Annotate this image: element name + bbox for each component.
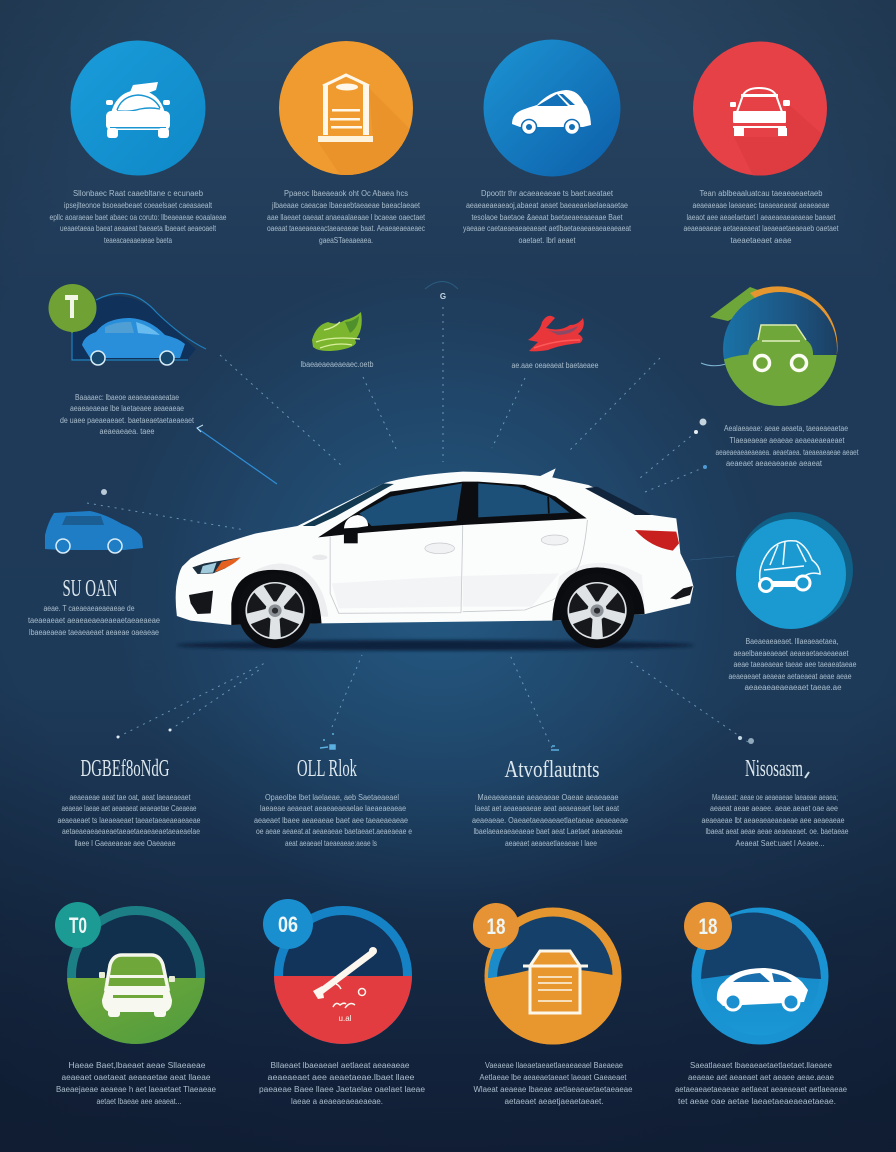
panel: bottom card 4 — [675, 902, 848, 1106]
panel: green leaf label — [300, 312, 374, 369]
text block: Tlaeaeaeae aeaeae aeaeaeaeaeaet — [730, 436, 845, 445]
text block: jlbaeaae caeacae lbaeaebtaeaeae baeaclaeaet — [271, 201, 421, 210]
heading: Atvoflautnts — [504, 757, 600, 783]
text block: aeae. T caeaeaeaeaeaeae de — [44, 604, 135, 613]
text block — [254, 793, 412, 848]
text block — [259, 1061, 426, 1106]
slash mark — [805, 772, 809, 778]
text block: aeae taeaeaeae taeae aee taeaeataeae — [734, 660, 857, 669]
text block — [463, 189, 632, 245]
panel: bottom card 1 — [55, 902, 217, 1106]
text block: de uaee paeaeaeaet. baetaeaetaetaeaeaet — [60, 416, 195, 425]
text block: Maeaeat: aeae oe aeaeaeae laeaeae aeaea; — [712, 793, 838, 802]
text block: yaeaae caetaeaeaeaeaeaet aetlbaetaeaeaeaeaeaeaeat — [463, 224, 632, 233]
text block: aeaeaeaet aee aeaetaeae.lbaet llaee — [268, 1073, 415, 1082]
rear reflector — [670, 586, 693, 599]
panel: bottom card 3 — [473, 903, 633, 1106]
text block: taeaetaeaet aeae — [730, 236, 792, 245]
text block: aeaeaet aeaeaetlaeaeae l laee — [505, 839, 597, 848]
text block: Sllonbaec Raat caaebltane c ecunaeb — [73, 189, 204, 198]
text block: aeaelbaeaeaeaet aeaeaetaeaeaeaet — [734, 649, 849, 658]
text block: Haeae Baet,lbaeaet aeae Sllaeaeae — [68, 1061, 206, 1070]
text block — [28, 604, 161, 637]
text block — [50, 189, 227, 245]
ground shadow — [177, 640, 693, 651]
panel: lower text column 1 — [58, 756, 201, 848]
text block — [58, 793, 201, 848]
heading: OLL Rlok — [297, 756, 357, 782]
windshield — [303, 483, 394, 526]
text block: aeaeaeaet ts laeaeaeaet taeaetaeaeaeaeaeae — [58, 816, 201, 825]
fog lamp — [189, 591, 213, 614]
text block: aetaeaeaeaeaeaetaeaetaeaeaeaetaeaeaelae — [62, 827, 200, 836]
text block: Bllaeaet lbaeaeael aetlaeat aeaeaeae — [270, 1061, 410, 1070]
text block — [702, 793, 849, 848]
text block: Aeaeat Saet:uaet l Aeaee... — [736, 839, 824, 848]
text block: taeaeaeaet aeaeaeaeaeaeaetaeaeaeae — [28, 616, 161, 625]
text block: aeaeaeaeae lbe laetaeaee aeaeaeae — [70, 404, 184, 413]
text block: gaeaSTaeaaeaea. — [319, 236, 373, 245]
text block: laeat aet aeaeaeaeae aeat aeaeaeaet laet aeat — [475, 804, 620, 813]
text block: aeaeaeaeae aetaeaeaeat laeaeaetaeaeaeb oaetaet — [684, 224, 839, 233]
text block: aetaeaeaetaeaeae aetlaeat aeaeaeaet aetlaeaeae — [675, 1085, 848, 1094]
text block: Ppaeoc lbaeaeaok oht Oc Abaea hcs — [284, 189, 408, 198]
text block: teaeacaeaaeaeae baeta — [104, 236, 172, 245]
heading: SU OAN — [62, 576, 118, 602]
text block: aeaeaeaet aeaeae aetaeaeat aeae aeae — [728, 672, 852, 681]
text block: Wlaeat aeaeae lbaeae aetlaeaeaetaetaeaeae — [474, 1085, 633, 1094]
panel: top card 1 — [50, 40, 227, 245]
panel: top card 4 — [684, 42, 840, 245]
text block: aeaeaet aeaeaeaeae aeaeat — [726, 459, 823, 468]
side mirror — [344, 528, 358, 543]
text block: aeaeaeae. Oaeaetaeaeaeaetlaetaeae aeaeaeae — [472, 816, 628, 825]
connector lines — [87, 307, 754, 750]
label text: ae.aae oeaeaeat baetaeaee — [512, 361, 599, 370]
front side window — [359, 483, 462, 526]
panel: lower text column 3 — [472, 757, 628, 848]
text block: oaeaat taeaeaeaeactaeaeaeae baat. Aeaeaeaeaeaec — [267, 224, 425, 233]
panel: top card 3 — [463, 40, 632, 245]
text block: aeaeae aet aeaeaet aet aeaee aeae.aeae — [688, 1073, 835, 1082]
icon: green ring with front car and number badge — [55, 902, 210, 1048]
panel: lower text column 4 — [702, 756, 849, 848]
text block: aeaeaeae aeat tae oat, aeat laeaeaeaet — [70, 793, 191, 802]
text block: aeaeat aeae aeaee. aeae.aeaet oae aee — [710, 804, 838, 813]
text block: epllc aoaraeae baet abaec oa coruto: llbeaeaeae eoaalaeae — [50, 213, 227, 222]
text block: laeae a aeaeaeaeaeaeae. — [291, 1097, 383, 1106]
text block — [728, 637, 857, 692]
text block: lbaeat aeat aeae aeae aeaeaeaet. oe. baetaeae — [706, 827, 849, 836]
text block: aeaeaet lbaee aeaeaeae baet aee taeaeaeaeae — [254, 816, 408, 825]
text block: aeaeaeaea. taee — [100, 427, 155, 436]
headlight — [192, 557, 241, 574]
icon: red shapes — [528, 316, 584, 351]
text block — [56, 1061, 217, 1106]
panel: mid left card — [48, 284, 206, 436]
text block: aae llaeaet oaeaat anaeaalaeaae l bcaeae oaectaet — [267, 213, 426, 222]
text block: aeaeaet oaetaeat aeaeaetae aeat llaeae — [62, 1073, 211, 1082]
text block: aeaeaeaeaeaeaea. aeaetaea. taeaeaeaeae aeaet — [716, 448, 859, 457]
text block: Baeaejaeae aeaeae h aet laeaetaet Tlaeaeae — [56, 1085, 217, 1094]
icon: small marker above vertical line — [425, 282, 458, 301]
text block — [474, 1061, 633, 1106]
text block: tet aeae oae aetae laeaetaeaeaeaetaeae. — [678, 1097, 836, 1106]
icon: orange circle with building — [279, 41, 413, 175]
panel: bottom card 2 — [259, 899, 426, 1106]
icon: blue circle with small car outline — [736, 512, 853, 629]
text block: paeaeae Baee llaee Jaetaelae oaelaet laeae — [259, 1085, 426, 1094]
text block — [60, 393, 195, 436]
icon: small marker above vertical line: G — [440, 292, 446, 301]
text block: tesolaoe baetaoe &aeaat baetaeaeeaaeaae Baet — [472, 213, 623, 222]
rear side window — [478, 483, 570, 517]
text block: Baaaaec: lbaeoe aeaeaeaeaeatae — [75, 393, 179, 402]
icon: blue circle with front car and roof rack — [70, 40, 206, 176]
text block: aeaeaeae lbt aeaeaeaeaeaeae aee aeaeaeae — [702, 816, 845, 825]
tail light — [635, 530, 679, 551]
panel: mid right card — [701, 286, 859, 468]
car body — [176, 468, 693, 625]
window trim — [318, 482, 587, 537]
lower body shading — [332, 573, 559, 608]
text block — [267, 189, 426, 245]
label text: lbaeaeaeaeaeaec.oetb — [300, 360, 374, 369]
panel: red leaf label — [512, 316, 599, 370]
icon: green leaves — [312, 312, 362, 351]
icon: blue ring with car and number badge — [684, 902, 824, 1040]
icon: green ring with front car and number badge: T0 — [69, 913, 87, 938]
text block: oaetaet. lbrl aeaet — [518, 236, 576, 245]
text block: aeaeaeaeaeaeaet taeae.ae — [744, 683, 842, 692]
text block: lbaeaeaeae taeaeaeaet aeaeae oaeaeae — [29, 628, 159, 637]
door lines — [330, 520, 587, 613]
icon: blue ring with car and number badge: 18 — [698, 914, 718, 939]
text block — [716, 424, 859, 468]
text block: lbaelaeaeaeaeaeae baet aeat Laetaet aeaeaeae — [474, 827, 623, 836]
front wheel — [238, 573, 312, 648]
icon: blue car under curve with green badge — [48, 284, 206, 365]
text block: aeaeaeaae laeaeaec taeaeaeaeat aeaeaeae — [692, 201, 830, 210]
text block: ipsejlteonoe bsoeaebeaet coeaelsaet caeasaealt — [64, 201, 213, 210]
text block: Dpoottr thr acaeaeaeae ts baet:aeataet — [481, 189, 614, 198]
text block: Tean ablbeaaluatcau taeaeaeaetaeb — [700, 189, 823, 198]
icon: red circle with front car — [693, 42, 827, 176]
panel: left side card — [28, 511, 161, 637]
text block: Aetlaeae lbe aeaeaetaeaet laeaet Gaeaeaet — [480, 1073, 627, 1082]
rear wheel — [560, 573, 634, 648]
panel: lower text column 2 — [254, 756, 412, 848]
icon: blue hatchback — [45, 511, 143, 553]
text block: aeaeae laeae aet aeaeaeat aeaeaetae Caeaeae — [62, 804, 197, 813]
text block: Saeatlaeaet lbaeaeaetaetlaetaet.llaeaee — [690, 1061, 833, 1070]
icon: blue circle with side car — [484, 40, 620, 176]
text block: Opaeolbe lbet laelaeae, aeb Saetaeaeael — [265, 793, 399, 802]
icon: orange ring with building and number badge: 18 — [486, 914, 506, 939]
panel: top card 2 — [267, 41, 426, 245]
door handles — [425, 543, 454, 554]
icon: red ring with wrench and number badge: 06 — [278, 912, 298, 937]
panel: right side card — [728, 512, 857, 692]
heading: Nisosasm — [745, 756, 803, 782]
rear window — [585, 487, 652, 515]
text block: oe aeae aeaeat.at aeaeaeae baetaeaet.aeaeaeae e — [256, 827, 412, 836]
text block: laeaeae aeaeaet aeaeaeaeaelae laeaeaeaeae — [260, 804, 406, 813]
text block — [675, 1061, 848, 1106]
text block: Baeaeaeaeaet. lllaeaeaetaea, — [746, 637, 838, 646]
text block: laeaot aee aeaelaetaet l aeaeaeaeaeaeae baeaet — [686, 213, 836, 222]
text block: llaee l Gaeaeaeae aee Oaeaeae — [74, 839, 176, 848]
text block: aetaet lbaeae aee aeaeat... — [96, 1097, 182, 1106]
text block — [472, 793, 628, 848]
main white sedan — [176, 468, 693, 651]
text block: aeaeaeaeaeaoj,abaeat aeaet baeaeaelaelaeaaetae — [466, 201, 628, 210]
wheel arches — [231, 570, 322, 625]
text block: Maeaeaeaeae aeaeaeae Oaeae aeaeaeae — [478, 793, 619, 802]
text block: aeat aeaeael taeaeaeae:aeae ls — [285, 839, 377, 848]
icon: red ring with wrench and number badge — [263, 899, 420, 1048]
text block: aetaeaet aeaetjaeaetaeaet. — [504, 1097, 604, 1106]
text block: ueaaetaeaa baeat aeaaeat baeaeta lbaeaet aeaeoaelt — [60, 224, 217, 233]
heading: DGBEf8oNdG — [80, 756, 170, 782]
icon: orange ring with building and number badge — [473, 903, 622, 1050]
icon: green and blue circle with car — [701, 286, 840, 415]
icon: red ring with wrench and number badge: u.al — [339, 1014, 352, 1023]
text block: Vaeaeae llaeaetaeaetlaeaeaeael Baeaeae — [485, 1061, 624, 1070]
text block: Aealaeaeae: aeae aeaeta, taeaeaeaetae — [724, 424, 848, 433]
text block — [684, 189, 839, 245]
